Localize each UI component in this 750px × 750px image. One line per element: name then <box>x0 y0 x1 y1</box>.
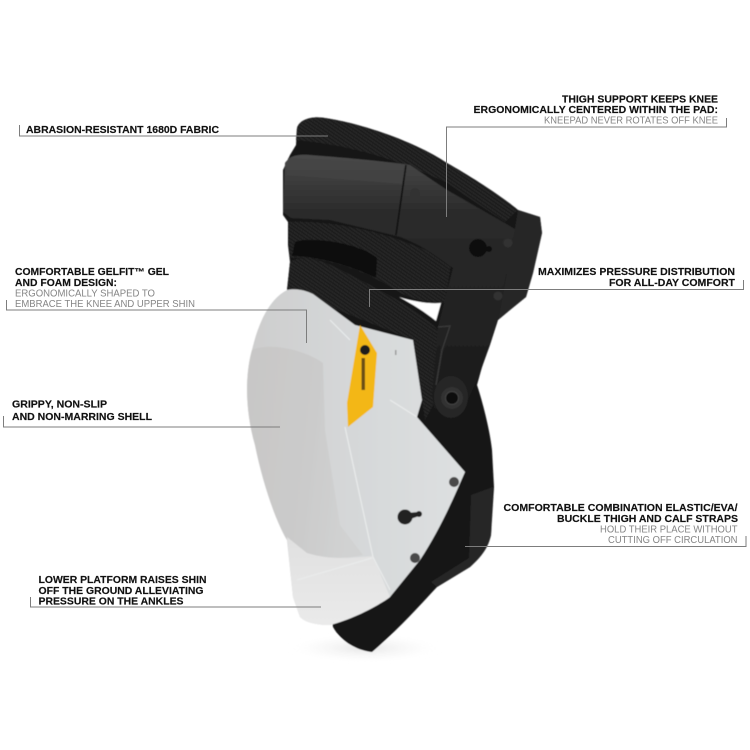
callout: lower platform: LOWER PLATFORM RAISES SHIN <box>38 575 206 586</box>
callout: straps: CUTTING OFF CIRCULATION <box>608 535 738 546</box>
callout: pressure distribution <box>370 267 744 307</box>
callout: thigh support: KNEEPAD NEVER ROTATES OFF KNEE <box>544 116 718 126</box>
badge logo mark <box>362 358 365 390</box>
icon: white gap between pads <box>399 297 441 321</box>
callout: straps: HOLD THEIR PLACE WITHOUT <box>600 524 738 536</box>
callout: abrasion-resistant fabric <box>20 125 328 136</box>
callout: straps: COMFORTABLE COMBINATION ELASTIC/EVA/ <box>504 503 738 514</box>
shell: ridge lines <box>297 320 417 590</box>
shell: central dome shading <box>247 347 363 558</box>
callout: gelfit gel and foam: EMBRACE THE KNEE AND UPPER SHIN <box>15 299 195 310</box>
callout: gelfit gel and foam: ERGONOMICALLY SHAPED TO <box>15 288 155 300</box>
callout: straps: BUCKLE THIGH AND CALF STRAPS <box>557 514 738 525</box>
callout: gelfit gel and foam: COMFORTABLE GELFIT™ GEL <box>15 267 169 278</box>
band highlight <box>287 158 404 184</box>
icon: rivets and keyhole on strut <box>410 188 512 300</box>
callout: grippy shell: AND NON-MARRING SHELL <box>12 412 152 423</box>
icon: top fabric pad <box>296 117 518 222</box>
callout: lower platform: PRESSURE ON THE ANKLES <box>38 596 184 608</box>
callout: grippy shell <box>4 400 280 427</box>
callout: lower platform <box>30 575 321 608</box>
callout: abrasion-resistant fabric: ABRASION-RESISTANT 1680D FABRIC <box>26 125 219 136</box>
kneepad product illustration <box>247 117 542 664</box>
icon: shell rivets and keyhole <box>395 350 459 563</box>
icon: strap patch on calf <box>431 487 493 587</box>
shell: lower platform <box>287 537 390 625</box>
icon: strut ridge <box>436 326 450 385</box>
icon: middle knee pad <box>288 222 451 303</box>
icon: black plastic thigh band and strut <box>283 155 515 415</box>
icon: white knee shell <box>247 289 465 625</box>
callout: pressure distribution: FOR ALL-DAY COMFORT <box>609 278 735 289</box>
icon: yellow logo badge <box>347 325 377 427</box>
icon: right thigh strap <box>498 210 542 320</box>
black pad silhouette <box>283 117 542 652</box>
callout: gelfit gel and foam: AND FOAM DESIGN: <box>15 278 117 289</box>
ground shadow <box>285 632 445 664</box>
icon: pivot joint <box>434 376 468 418</box>
callout: gelfit gel and foam <box>6 267 306 343</box>
callout: thigh support: THIGH SUPPORT KEEPS KNEE <box>562 94 718 106</box>
callout: thigh support <box>446 94 726 217</box>
icon: pad hollow <box>292 240 377 278</box>
callout: lower platform: OFF THE GROUND ALLEVIATING <box>38 586 204 597</box>
band seam <box>396 165 406 235</box>
callout: straps <box>465 503 746 546</box>
icon: lower fabric pad <box>287 258 438 420</box>
callout: pressure distribution: MAXIMIZES PRESSURE DISTRIBUTION <box>538 267 735 278</box>
icon: badge rivet <box>360 345 370 355</box>
callout: thigh support: ERGONOMICALLY CENTERED WITHIN THE PAD: <box>474 105 718 116</box>
callout: grippy shell: GRIPPY, NON-SLIP <box>12 400 107 410</box>
